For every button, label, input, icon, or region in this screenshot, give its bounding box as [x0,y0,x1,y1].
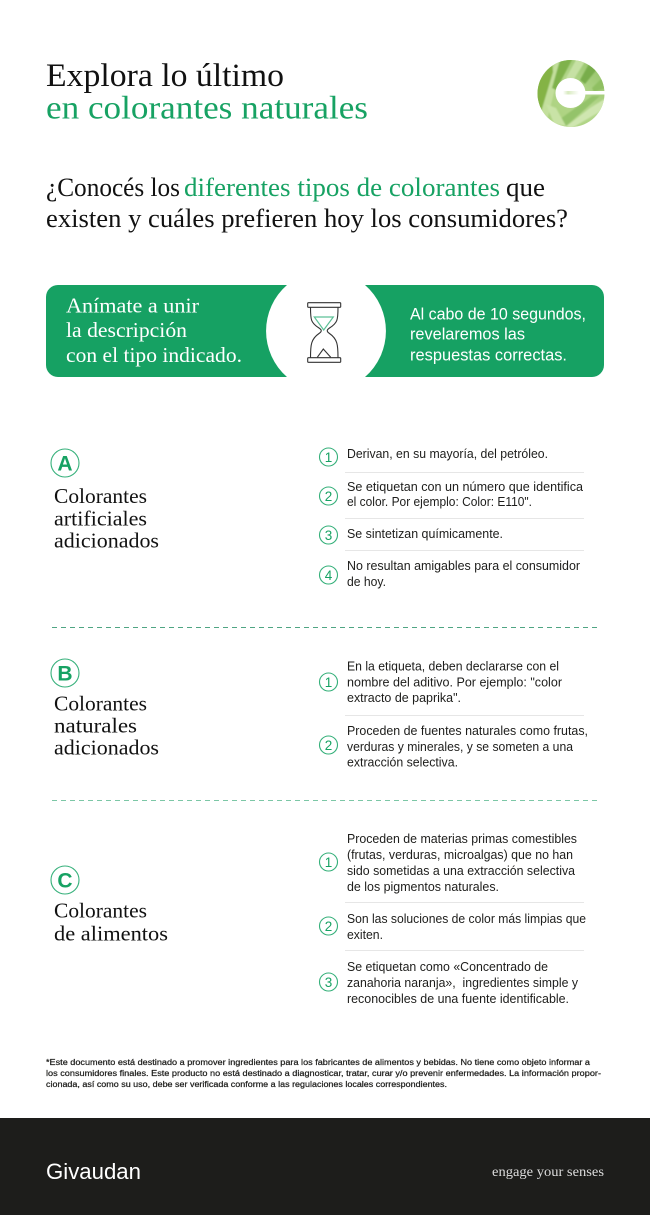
section C: heading [51,866,168,946]
item B2: 2 [325,738,332,753]
footnote: los consumidores finales. Este producto no está destinado a diagnosticar, tratar, curar y/o prevenir enfermedades. La información propor- [46,1069,601,1078]
item C2: Son las soluciones de color más limpias que [347,911,586,926]
item A1: 1 [325,450,332,465]
banner right text: revelaremos las [410,324,525,344]
section C: descriptions [320,831,586,1006]
item A3: 3 [325,528,332,543]
item A3 [320,526,503,544]
section B: heading: adicionados [54,736,159,760]
item A1: Derivan, en su mayoría, del petróleo. [347,446,548,461]
banner left text [66,294,242,367]
panel: instruction banner [46,285,604,377]
item B1 [320,658,563,705]
item C1: Proceden de materias primas comestibles [347,831,577,846]
title [46,58,368,126]
banner right text [410,304,586,364]
item C3: zanahoria naranja», ingredientes simple y [347,975,578,990]
item A1 [320,446,548,466]
section B: heading: naturales [54,714,137,738]
item C2: 2 [325,919,332,934]
question heading: existen y cuáles prefieren hoy los consumidores? [46,204,568,233]
item B2: verduras y minerales, y se someten a una [347,739,574,754]
item A2 [320,479,584,509]
item B1: 1 [325,675,332,690]
section B: descriptions [320,658,588,770]
item A4 [320,558,581,589]
section C: heading: de alimentos [54,922,168,946]
item A4: No resultan amigables para el consumidor [347,558,581,573]
title: Explora lo último [46,58,284,94]
item C3 [320,959,578,1006]
section B: heading [51,659,159,760]
item B2 [320,723,588,770]
item C3: reconocibles de una fuente identificable. [347,991,569,1006]
item A2: 2 [325,489,332,504]
item C3: 3 [325,975,332,990]
banner right green shape [365,285,604,377]
section A: heading: Colorantes [54,484,147,508]
item C2 [320,911,586,942]
section A: descriptions [320,446,584,589]
item C1: 1 [325,855,332,870]
tagline: engage your senses [492,1165,604,1180]
badge B: B [57,662,73,686]
footnote: *Este documento está destinado a promover ingredientes para los fabricantes de alimentos y bebidas. No tiene como objeto informar a [46,1058,591,1067]
item A4: 4 [325,568,333,583]
footer bar [0,1118,650,1215]
item C3: Se etiquetan como «Concentrado de [347,959,548,974]
question heading [46,173,568,233]
badge C: C [57,870,73,892]
question heading: que [506,173,545,202]
section C: heading: Colorantes [54,898,147,922]
item C1: sido sometidas a una extracción selectiva [347,863,576,878]
item C2: exiten. [347,927,383,942]
item B2: extracción selectiva. [347,754,458,770]
footnote: cionada, así como su uso, debe ser verificada conforme a las regulaciones locales correspondientes. [46,1080,447,1089]
banner left green shape [46,285,287,377]
item C1: (frutas, verduras, microalgas) que no han [347,847,573,862]
icon: hourglass [308,303,341,362]
item B1: nombre del aditivo. Por ejemplo: "color [347,674,563,690]
question heading: ¿Conocés los [46,173,180,202]
section A: heading: artificiales [54,506,147,530]
section B: heading: Colorantes [54,692,147,716]
item C1 [320,831,577,894]
item C1: de los pigmentos naturales. [347,879,499,894]
banner left text: la descripción [66,318,188,342]
badge A: A [57,452,73,476]
item A4: de hoy. [347,574,386,589]
icon: Givaudan G logo [536,58,606,128]
Givaudan wordmark: Givaudan [46,1159,141,1184]
item A2: el color. Por ejemplo: Color: E110". [347,494,532,509]
item B2: Proceden de fuentes naturales como frutas, [347,723,588,738]
banner left text: con el tipo indicado. [66,343,242,367]
item B1: En la etiqueta, deben declararse con el [347,658,559,674]
banner right text: respuestas correctas. [410,346,567,364]
item A2: Se etiquetan con un número que identifica [347,479,584,494]
item A3: Se sintetizan químicamente. [347,526,503,541]
banner right text: Al cabo de 10 segundos, [410,304,586,324]
title: en colorantes naturales [46,90,368,126]
footnote [46,1058,601,1089]
item B1: extracto de paprika". [347,690,461,705]
question heading: diferentes tipos de colorantes [184,173,500,202]
section A: heading [51,449,159,552]
banner left text: Anímate a unir [66,294,199,318]
section A: heading: adicionados [54,528,159,552]
